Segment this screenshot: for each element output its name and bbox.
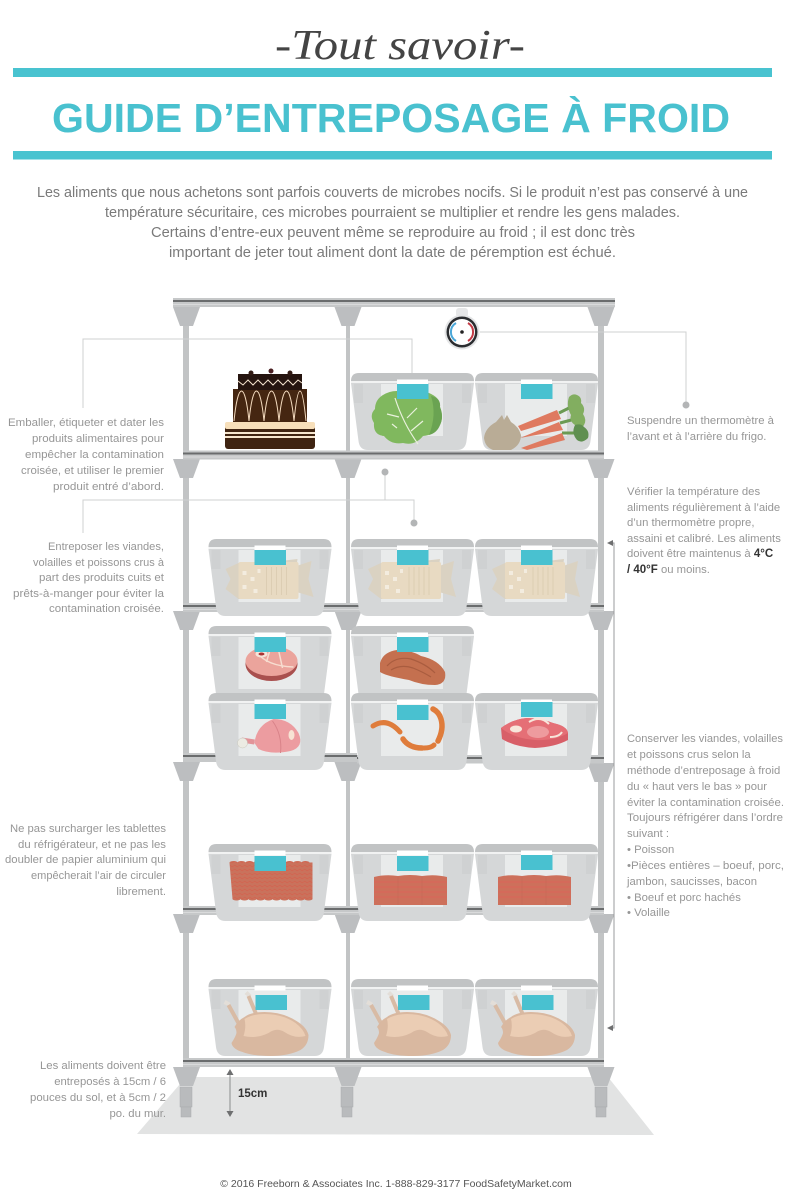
note: raw meats apart: Entreposer les viandes, bbox=[48, 541, 164, 553]
bin: sausages bbox=[351, 693, 474, 770]
intro text bbox=[37, 185, 748, 261]
note: check temperature bbox=[627, 486, 781, 576]
bin: lettuce bbox=[351, 373, 474, 450]
icon: thermometer bbox=[444, 308, 480, 350]
bin: fish center bbox=[351, 539, 474, 616]
note: floor distance bbox=[30, 1060, 166, 1120]
intro text: Certains d’entre-eux peuvent même se reproduire au froid ; il est donc très bbox=[151, 225, 635, 241]
cake bbox=[225, 368, 315, 449]
note: thermometer placement: Suspendre un thermomètre à bbox=[627, 415, 775, 427]
bin: chicken right bbox=[475, 979, 598, 1056]
bin: patties right bbox=[475, 844, 598, 921]
note: top-to-bottom storage order: Conserver les viandes, volailles bbox=[627, 733, 783, 745]
height label: 15cm bbox=[238, 1088, 267, 1100]
note: do not overload: doubler de papier aluminium qui bbox=[5, 854, 166, 866]
bin: onion and carrots bbox=[475, 373, 598, 450]
intro text: température sécuritaire, ces microbes pourraient se multiplier et rendre les gens malades. bbox=[105, 205, 680, 221]
bin: patties center bbox=[351, 844, 474, 921]
posts bbox=[183, 320, 604, 1060]
note: top-to-bottom storage order: éviter la contamination croisée. bbox=[627, 797, 784, 809]
bracket arrow bbox=[607, 540, 614, 1031]
note: top-to-bottom storage order: • Boeuf et porc hachés bbox=[627, 892, 741, 904]
height arrow bbox=[226, 1069, 234, 1117]
bin: beef roast bbox=[351, 626, 474, 703]
footer: © 2016 Freeborn & Associates Inc. 1-888-829-3177 FoodSafetyMarket.com bbox=[220, 1178, 572, 1190]
note: do not overload bbox=[5, 823, 166, 898]
connector dots bbox=[382, 382, 690, 526]
note: top-to-bottom storage order: • Poisson bbox=[627, 844, 674, 856]
title: Tout savoir: -Tout savoir- bbox=[275, 23, 525, 69]
note: wrap and label: produit entré d’abord. bbox=[53, 481, 164, 493]
bin: fish left bbox=[208, 539, 332, 616]
note: raw meats apart: contamination croisée. bbox=[49, 603, 164, 615]
bin: ground meat bbox=[208, 844, 332, 921]
note: top-to-bottom storage order: Toujours réfrigérer dans l’ordre bbox=[627, 812, 783, 824]
bin: ham bbox=[208, 693, 332, 770]
note: top-to-bottom storage order bbox=[626, 733, 784, 919]
connector lines bbox=[83, 332, 686, 533]
note: wrap and label: Emballer, étiqueter et dater les bbox=[8, 417, 164, 429]
note: top-to-bottom storage order: méthode d’entreposage à froid bbox=[627, 765, 780, 777]
note: floor distance: entreposés à 15cm / 6 bbox=[54, 1076, 166, 1088]
note: floor distance: pouces du sol, et à 5cm / 2 bbox=[30, 1092, 166, 1104]
note: top-to-bottom storage order: et poissons crus selon la bbox=[627, 749, 751, 761]
note: top-to-bottom storage order: suivant : bbox=[627, 828, 669, 840]
note: raw meats apart: prêts-à-manger pour éviter la bbox=[13, 588, 165, 600]
note: check temperature: doivent être maintenus à 4°C bbox=[627, 548, 773, 560]
bin: chicken left bbox=[208, 979, 332, 1056]
note: do not overload: librement. bbox=[116, 886, 166, 898]
bottom teal bar bbox=[13, 151, 772, 160]
top teal bar bbox=[13, 68, 772, 77]
note: do not overload: empêcherait l’air de circuler bbox=[31, 870, 166, 882]
note: floor distance: Les aliments doivent être bbox=[40, 1060, 166, 1072]
note: floor distance: po. du mur. bbox=[109, 1108, 166, 1120]
note: raw meats apart: volailles et poissons crus à bbox=[33, 557, 165, 569]
intro text: important de jeter tout aliment dont la date de péremption est échué. bbox=[169, 245, 616, 261]
shelves bbox=[183, 450, 604, 1067]
bin: steak bbox=[475, 693, 598, 770]
note: top-to-bottom storage order: jambon, saucisses, bacon bbox=[626, 876, 757, 888]
note: top-to-bottom storage order: du « haut vers le bas » pour bbox=[627, 781, 767, 793]
note: check temperature: / 40°F ou moins. bbox=[627, 564, 710, 576]
note: raw meats apart bbox=[13, 541, 165, 615]
heading: GUIDE D’ENTREPOSAGE À FROID bbox=[52, 95, 730, 141]
floor bbox=[137, 1077, 654, 1135]
note: wrap and label: croisée, et utiliser le premier bbox=[21, 465, 164, 477]
intro text: Les aliments que nous achetons sont parfois couverts de microbes nocifs. Si le produit n’est pas conservé à une bbox=[37, 185, 748, 201]
note: wrap and label: produits alimentaires pour bbox=[32, 433, 164, 445]
note: do not overload: du réfrigérateur, et ne pas les bbox=[18, 839, 166, 851]
note: raw meats apart: part des produits cuits et bbox=[39, 572, 165, 584]
bin: chicken center bbox=[351, 979, 474, 1056]
note: top-to-bottom storage order: •Pièces entières – boeuf, porc, bbox=[627, 860, 784, 872]
note: wrap and label: empêcher la contamination bbox=[25, 449, 164, 461]
note: top-to-bottom storage order: • Volaille bbox=[627, 907, 670, 919]
note: do not overload: Ne pas surcharger les tablettes bbox=[10, 823, 166, 835]
note: thermometer placement: l’avant et à l’arrière du frigo. bbox=[627, 431, 766, 443]
feet bbox=[180, 1087, 607, 1117]
note: check temperature: aliments régulièrement à l’aide bbox=[627, 502, 780, 514]
shelving unit bbox=[173, 298, 615, 1117]
bin: fish right bbox=[475, 539, 598, 616]
top shelf bbox=[173, 298, 615, 307]
note: wrap and label bbox=[8, 417, 164, 493]
shelf brackets bbox=[173, 307, 614, 1086]
note: thermometer placement bbox=[627, 415, 775, 443]
note: check temperature: assaini et calibré. Les aliments bbox=[627, 533, 781, 545]
note: check temperature: Vérifier la température des bbox=[627, 486, 760, 498]
bin: pork chop bbox=[208, 626, 332, 703]
note: check temperature: d’un thermomètre propre, bbox=[627, 517, 754, 529]
